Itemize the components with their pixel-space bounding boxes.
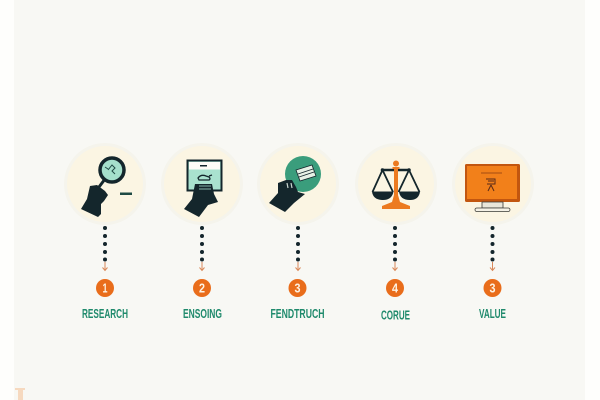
icon: orange monitor xyxy=(452,143,534,225)
step 2: ensoing xyxy=(161,143,243,321)
label: research: RESEARCH xyxy=(82,306,128,321)
connector: dotted arrow xyxy=(392,226,398,270)
step 5: value xyxy=(452,143,534,321)
number badge 4: 4 xyxy=(392,280,399,296)
number badge 3 xyxy=(288,279,306,297)
number badge 4 xyxy=(386,279,404,297)
number badge 5 xyxy=(484,279,502,297)
step 4: corue xyxy=(355,143,437,322)
connector: dotted arrow xyxy=(102,226,108,270)
number badge 3: 3 xyxy=(294,280,300,296)
connector: dotted arrow xyxy=(490,226,495,270)
number badge 5: 3 xyxy=(490,280,496,296)
number badge 2: 2 xyxy=(199,280,205,296)
label: ensoing: ENSOING xyxy=(183,306,222,321)
label: corue: CORUE xyxy=(381,308,410,322)
step 1: research xyxy=(64,143,146,321)
icon: magnifier and hand xyxy=(64,143,146,225)
label: fendtruch: FENDTRUCH xyxy=(270,306,324,321)
number badge 2 xyxy=(193,279,211,297)
corner mark xyxy=(15,388,25,400)
step 3: fendtruch xyxy=(257,143,339,321)
number badge 1 xyxy=(96,279,114,297)
number badge 1: 1 xyxy=(102,280,108,296)
label: value: VALUE xyxy=(479,306,506,321)
icon: balance scales xyxy=(355,143,437,225)
connector: dotted arrow xyxy=(296,226,300,270)
connector: dotted arrow xyxy=(200,226,204,270)
icon: green disc and hand xyxy=(257,143,339,225)
icon: browser window and hand xyxy=(161,143,243,225)
